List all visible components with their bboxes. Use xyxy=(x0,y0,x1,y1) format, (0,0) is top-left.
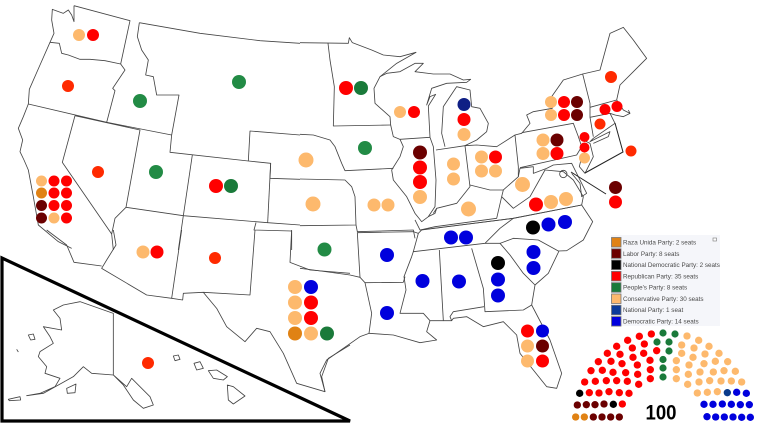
inset: Alaska and Hawaii xyxy=(2,258,350,421)
legend: Democratic Party: 14 seats xyxy=(623,318,699,325)
callout leader lines xyxy=(571,123,623,194)
Alaska and Hawaii outlines xyxy=(8,302,245,408)
parliament chart: People's Party seats xyxy=(653,329,679,381)
parliament chart: left seats xyxy=(572,330,660,421)
parliament chart: right seats xyxy=(673,332,754,421)
legend xyxy=(611,235,720,326)
seat markers by state xyxy=(36,29,636,369)
legend: National Party: 1 seat xyxy=(623,307,683,314)
legend: Conservative Party: 30 seats xyxy=(623,296,704,303)
legend: Raza Unida Party: 2 seats xyxy=(623,240,696,246)
legend: Labor Party: 8 seats xyxy=(623,251,679,258)
legend: People's Party: 8 seats xyxy=(623,284,687,292)
inset border xyxy=(2,258,350,421)
legend: Republican Party: 35 seats xyxy=(623,273,698,280)
map: state outlines xyxy=(18,6,647,392)
legend: National Democratic Party: 2 seats xyxy=(623,262,720,269)
